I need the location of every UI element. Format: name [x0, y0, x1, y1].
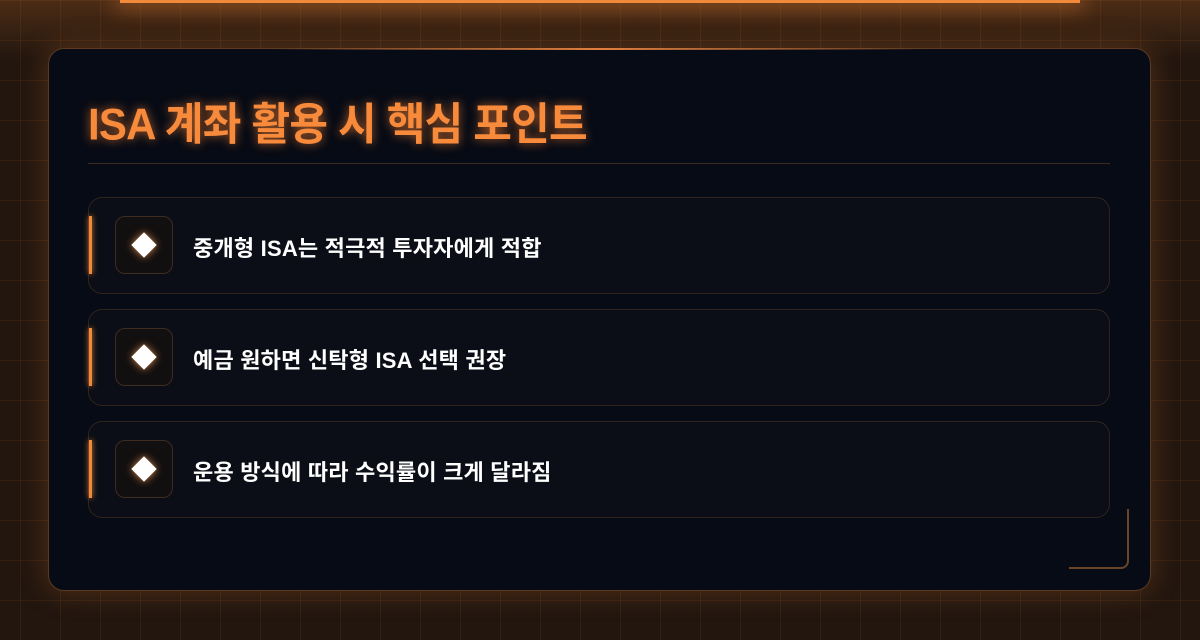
- text: 운용 방식에 따라 수익률이 크게 달라짐: [193, 460, 552, 485]
- item 3: [88, 421, 1110, 518]
- title: ISA 계좌 활용 시 핵심 포인트: [88, 100, 587, 149]
- panel: main card: [48, 48, 1151, 591]
- item 1: [88, 197, 1110, 294]
- item 2: [88, 309, 1110, 406]
- text: 중개형 ISA는 적극적 투자자에게 적합: [193, 236, 542, 261]
- text: 예금 원하면 신탁형 ISA 선택 권장: [193, 348, 506, 373]
- icon: diamond: [115, 328, 173, 386]
- icon: diamond: [115, 440, 173, 498]
- corner bracket decoration: [1069, 509, 1129, 569]
- icon: diamond: [115, 216, 173, 274]
